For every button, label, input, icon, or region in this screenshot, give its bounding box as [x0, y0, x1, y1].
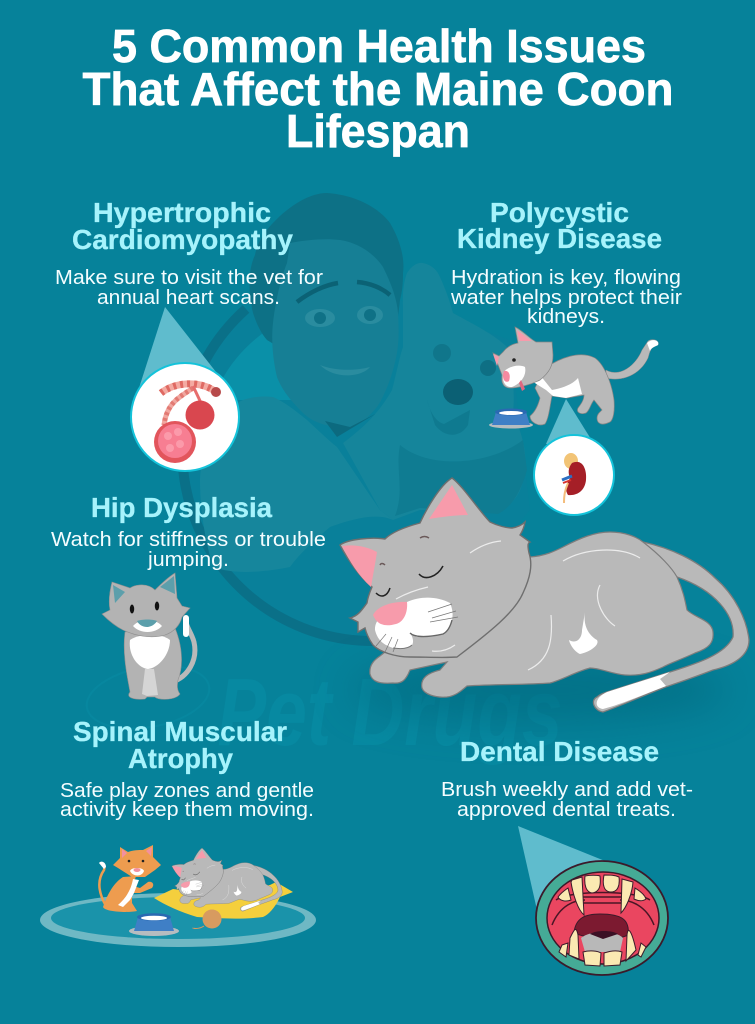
heading: hip dysplasia: Hip Dysplasia	[91, 492, 272, 523]
heading: polycystic kidney disease: Polycystic	[490, 197, 629, 228]
text: dental advice: approved dental treats.	[457, 798, 676, 821]
heading: dental disease: Dental Disease	[460, 736, 659, 767]
text: heart advice	[55, 266, 323, 309]
callout pointer	[518, 826, 610, 910]
text: heart advice: annual heart scans.	[97, 286, 280, 309]
heading: spinal muscular atrophy: Atrophy	[128, 743, 233, 774]
text: kidney advice: water helps protect their	[450, 286, 682, 309]
panel: dental disease	[441, 736, 693, 975]
text: dental advice: Brush weekly and add vet-	[441, 778, 693, 801]
background portrait: dog	[343, 263, 527, 520]
title: That Affect the Maine Coon	[82, 63, 674, 115]
icon: sitting cat	[102, 573, 195, 699]
callout pointer	[546, 399, 594, 444]
panel: polycystic kidney disease	[450, 197, 682, 515]
text: kidney advice: Hydration is key, flowing	[451, 266, 681, 289]
text: hip advice	[51, 528, 326, 571]
text: spinal advice: Safe play zones and gentle	[60, 779, 314, 802]
heading: hypertrophic cardiomyopathy	[72, 197, 293, 255]
title: 5 Common Health Issues	[112, 20, 646, 72]
callout pointer	[139, 307, 216, 388]
text: heart advice: Make sure to visit the vet for	[55, 266, 323, 289]
background portrait: ring	[182, 300, 530, 641]
watermark logo	[82, 657, 562, 766]
panel: hip dysplasia	[51, 492, 326, 699]
background portrait: man	[200, 193, 403, 572]
watermark logo: Pet Drugs	[218, 659, 562, 766]
pillow	[154, 882, 293, 919]
yarn ball	[193, 910, 222, 928]
heading: spinal muscular atrophy	[73, 716, 287, 774]
text: hip advice: jumping.	[147, 548, 229, 571]
icon: kidney	[534, 435, 614, 515]
heading: polycystic kidney disease: Kidney Disease	[457, 223, 662, 254]
illustration: sleeping grey cat	[340, 478, 749, 712]
heading: hypertrophic cardiomyopathy: Hypertrophic	[93, 197, 271, 228]
text: kidney advice	[450, 266, 682, 328]
panel: hypertrophic cardiomyopathy	[55, 197, 323, 471]
heading: spinal muscular atrophy: Spinal Muscular	[73, 716, 287, 747]
text: hip advice: Watch for stiffness or trouble	[51, 528, 326, 551]
title: Lifespan	[286, 105, 470, 157]
panel: spinal muscular atrophy	[40, 716, 316, 947]
text: spinal advice: activity keep them moving.	[60, 798, 314, 821]
heading: hypertrophic cardiomyopathy: Cardiomyopathy	[72, 224, 293, 255]
icon: heart tissue	[131, 363, 239, 471]
icon: drinking cat	[493, 327, 658, 425]
icon: water bowl	[489, 408, 533, 428]
text: spinal advice	[60, 779, 314, 821]
title	[82, 20, 674, 157]
milk bowl	[129, 913, 179, 936]
small sleeping cat	[172, 848, 282, 911]
icon: open mouth	[536, 861, 668, 975]
text: kidney advice: kidneys.	[527, 305, 605, 328]
orange cat	[99, 845, 161, 912]
text: dental advice	[441, 778, 693, 821]
heading: polycystic kidney disease	[457, 197, 662, 254]
big cat shadow	[350, 658, 730, 722]
rug	[40, 893, 316, 947]
illustration: rug with cats	[40, 845, 316, 947]
